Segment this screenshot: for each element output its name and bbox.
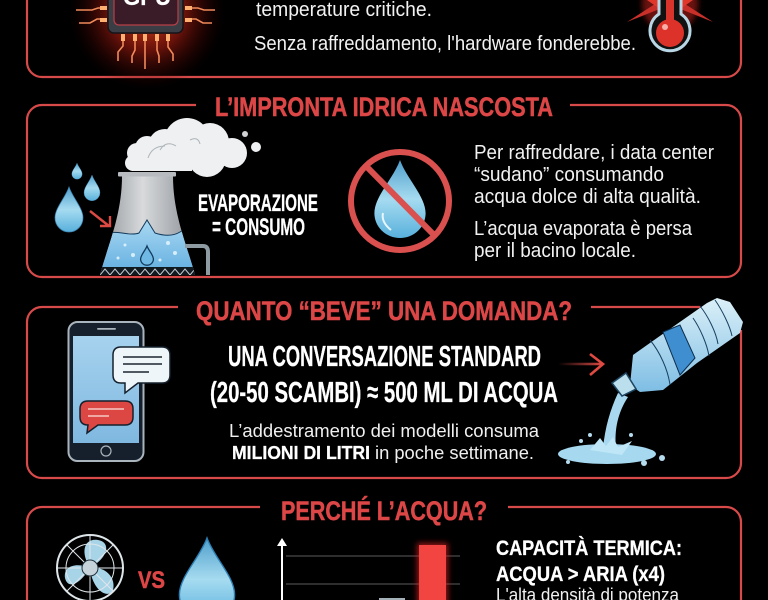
icon: no water: [351, 152, 449, 250]
icon: smartphone with chat: [68, 322, 170, 461]
bar chart: heat capacity: [277, 538, 460, 600]
text: standard conversation: (20-50 SCAMBI) ≈ 500 ML DI ACQUA: [210, 377, 558, 409]
panel: why water: [27, 495, 741, 600]
icon: pouring water bottle: [558, 298, 743, 466]
arrow: to bottle: [558, 354, 603, 375]
text: heat description: Senza raffreddamento, l'hardware fonderebbe.: [254, 33, 636, 55]
label: evaporation = consumption: EVAPORAZIONE: [198, 190, 318, 217]
text: training consumption: [229, 421, 540, 463]
panel: water per query: [27, 296, 743, 478]
text: standard conversation: [210, 341, 558, 409]
text: water footprint description: [474, 142, 714, 262]
heading: water per query: QUANTO “BEVE” UNA DOMANDA?: [196, 296, 572, 326]
text: heat capacity: CAPACITÀ TERMICA:: [496, 537, 682, 560]
text: water footprint description: L’acqua evaporata è persa: [474, 218, 693, 240]
text: water footprint description: “sudano” consumando: [474, 164, 664, 186]
icon: cooling tower: [95, 118, 261, 280]
text: water footprint description: Per raffreddare, i data center: [474, 142, 714, 164]
icon: water drops: [55, 163, 100, 232]
text: training consumption: L’addestramento dei modelli consuma: [229, 421, 540, 441]
text: water footprint description: acqua dolce di alta qualità.: [474, 186, 701, 208]
icon: thermometer: [627, 0, 713, 51]
arrow: drops into tower: [90, 211, 110, 226]
text: training consumption: in poche settimane.: [375, 443, 534, 463]
text: training consumption: MILIONI DI LITRI: [232, 443, 370, 463]
heading: why water: PERCHÉ L’ACQUA?: [281, 495, 487, 526]
heading: water footprint: L’IMPRONTA IDRICA NASCOSTA: [215, 92, 553, 122]
label: evaporation = consumption: [198, 190, 318, 241]
text: standard conversation: UNA CONVERSAZIONE STANDARD: [228, 341, 541, 373]
label: evaporation = consumption: = CONSUMO: [212, 214, 305, 241]
text: heat capacity: ACQUA > ARIA (x4): [496, 563, 665, 586]
text: heat capacity: [496, 537, 682, 600]
panel: water footprint: [27, 92, 741, 280]
label: vs: VS: [138, 567, 165, 594]
icon: water drop: [179, 538, 235, 600]
text: water footprint description: per il bacino locale.: [474, 240, 636, 262]
text: heat description: [254, 0, 636, 55]
panel: heat (top, cropped): [27, 0, 741, 90]
icon: fan: [57, 535, 123, 600]
icon: GPU chip: [69, 0, 225, 90]
